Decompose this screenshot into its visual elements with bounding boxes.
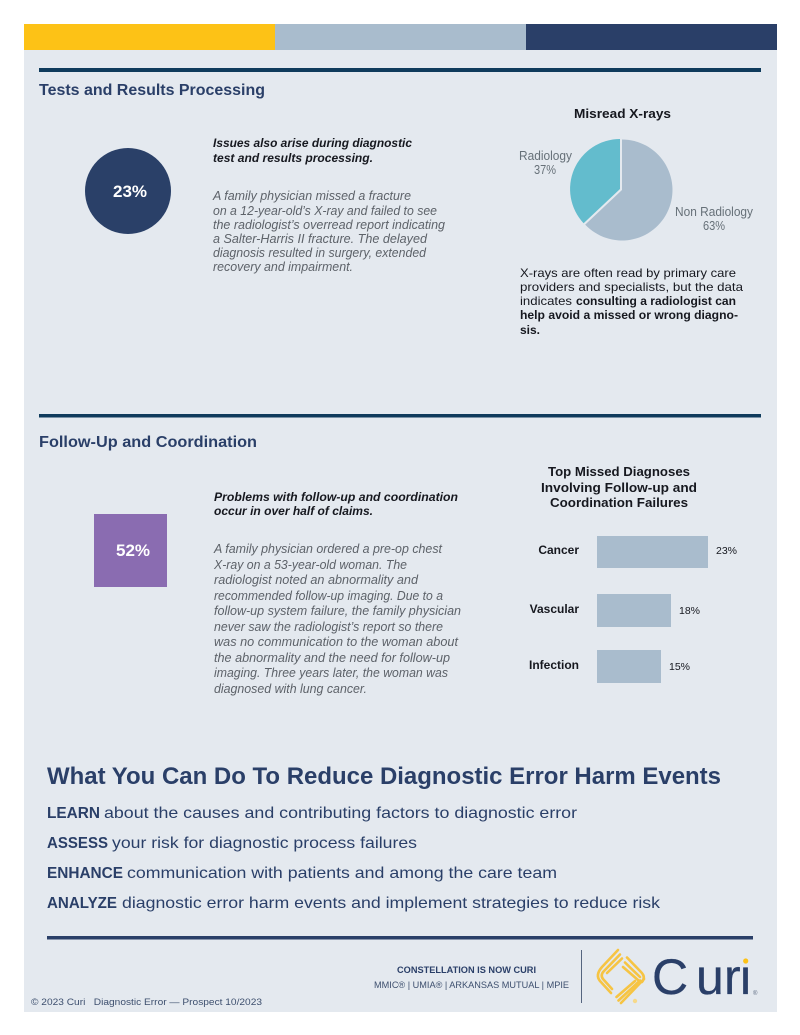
top colour bar	[24, 24, 777, 50]
label: radiology: Radiology	[519, 149, 573, 163]
panel: tests and results processing	[39, 68, 761, 337]
heading: tests and results processing: Tests and Results Processing	[39, 82, 265, 99]
text block: x-ray takeaway	[520, 266, 743, 337]
action: analyze: ANALYZE	[47, 895, 117, 912]
label: radiology	[519, 149, 573, 177]
text block: x-ray takeaway: providers and specialists, but the data	[520, 280, 743, 294]
text block: issues lead-in	[213, 136, 412, 165]
text block: x-ray takeaway: consulting a radiologist can	[576, 294, 736, 308]
panel: follow-up and coordination	[39, 414, 761, 696]
text block: fracture case: recovery and impairment.	[213, 260, 353, 274]
footer: constellation note	[374, 965, 569, 991]
text block: problems lead-in: occur in over half of claims.	[214, 504, 373, 518]
footer: constellation note: CONSTELLATION IS NOW CURI	[397, 965, 536, 975]
text block: fracture case: on a 12-year-old’s X-ray and failed to see	[213, 204, 437, 218]
text block: fracture case: a Salter-Harris II fracture. The delayed	[213, 232, 428, 246]
pie chart: misread x-rays	[519, 139, 754, 240]
action: learn: LEARN	[47, 805, 100, 822]
label: radiology: 37%	[534, 163, 556, 177]
stat: 23 percent circle: 23%	[113, 182, 147, 201]
chart title: top missed diagnoses: Coordination Failures	[550, 495, 688, 510]
stat: 23 percent circle	[85, 148, 171, 234]
chart title: top missed diagnoses: Top Missed Diagnoses	[548, 464, 690, 479]
bar: infection: Infection	[529, 658, 579, 672]
text block: x-ray takeaway: sis.	[520, 323, 540, 337]
bar chart: top missed diagnoses	[529, 536, 737, 683]
text block: chest x-ray case: X-ray on a 53-year-old woman. The	[213, 558, 407, 572]
icon: curi diamond mark	[598, 950, 644, 1003]
chart title: top missed diagnoses	[541, 464, 697, 510]
text block: chest x-ray case	[213, 542, 461, 696]
text block: problems lead-in: Problems with follow-up and coordination	[214, 490, 458, 504]
text block: fracture case: diagnosis resulted in surgery, extended	[213, 246, 427, 260]
bar: cancer	[538, 536, 737, 568]
text block: chest x-ray case: A family physician ordered a pre-op chest	[213, 542, 443, 556]
bar: vascular: 18%	[679, 605, 700, 617]
action: enhance: ENHANCE	[47, 865, 123, 882]
text block: chest x-ray case: imaging. Three years later, the woman was	[214, 666, 448, 680]
text block: fracture case: A family physician missed a fracture	[212, 189, 411, 203]
bar: infection: 15%	[669, 661, 690, 673]
bar: cancer: Cancer	[538, 543, 579, 557]
heading: follow-up and coordination: Follow-Up and Coordination	[39, 434, 257, 451]
panel: what you can do	[47, 763, 753, 940]
text block: chest x-ray case: the abnormality and the need for follow-up	[214, 651, 450, 665]
bar: cancer: 23%	[716, 545, 737, 557]
text block: chest x-ray case: never saw the radiologist’s report so there	[214, 620, 443, 634]
heading: what you can do: What You Can Do To Reduce Diagnostic Error Harm Events	[47, 763, 721, 790]
action: analyze: diagnostic error harm events and implement strategies to reduce risk	[122, 895, 661, 912]
text block: issues lead-in: Issues also arise during diagnostic	[213, 136, 412, 150]
text block: chest x-ray case: follow-up system failure, the family physician	[214, 604, 461, 618]
bar: vascular: Vascular	[530, 602, 579, 616]
wordmark: curi: Curi	[652, 949, 751, 1005]
logo: curi: ®	[753, 990, 758, 997]
action: learn: about the causes and contributing factors to diagnostic error	[104, 805, 578, 822]
text block: problems lead-in	[214, 490, 458, 518]
action: assess: ASSESS	[47, 835, 108, 852]
text block: x-ray takeaway: help avoid a missed or wrong diagno-	[520, 308, 738, 322]
action: assess: your risk for diagnostic process failures	[112, 835, 417, 852]
label: non radiology: Non Radiology	[675, 205, 754, 219]
bar: vascular	[530, 594, 700, 627]
chart title: misread x-rays: Misread X-rays	[574, 106, 671, 121]
text block: chest x-ray case: diagnosed with lung cancer.	[214, 682, 367, 696]
text block: chest x-ray case: was no communication to the woman about	[214, 635, 459, 649]
text block: issues lead-in: test and results processing.	[213, 151, 373, 165]
text block: fracture case: the radiologist’s overread report indicating	[213, 218, 445, 232]
label: non radiology	[675, 205, 754, 233]
chart title: top missed diagnoses: Involving Follow-up and	[541, 480, 697, 495]
text block: fracture case	[212, 189, 445, 274]
footer: copyright: © 2023 Curi Diagnostic Error — Prospect 10/2023	[31, 997, 262, 1008]
text block: x-ray takeaway: X-rays are often read by primary care	[520, 266, 736, 280]
text block: chest x-ray case: recommended follow-up imaging. Due to a	[214, 589, 443, 603]
stat: 52 percent square: 52%	[116, 541, 150, 560]
action: enhance: communication with patients and among the care team	[127, 865, 557, 882]
footer: constellation note: MMIC® | UMIA® | ARKANSAS MUTUAL | MPIE	[374, 980, 569, 991]
bar: infection	[529, 650, 690, 683]
text block: chest x-ray case: radiologist noted an abnormality and	[214, 573, 419, 587]
logo: curi	[598, 949, 758, 1005]
text block: x-ray takeaway: indicates	[520, 294, 572, 308]
label: non radiology: 63%	[703, 219, 725, 233]
stat: 52 percent square	[94, 514, 167, 587]
